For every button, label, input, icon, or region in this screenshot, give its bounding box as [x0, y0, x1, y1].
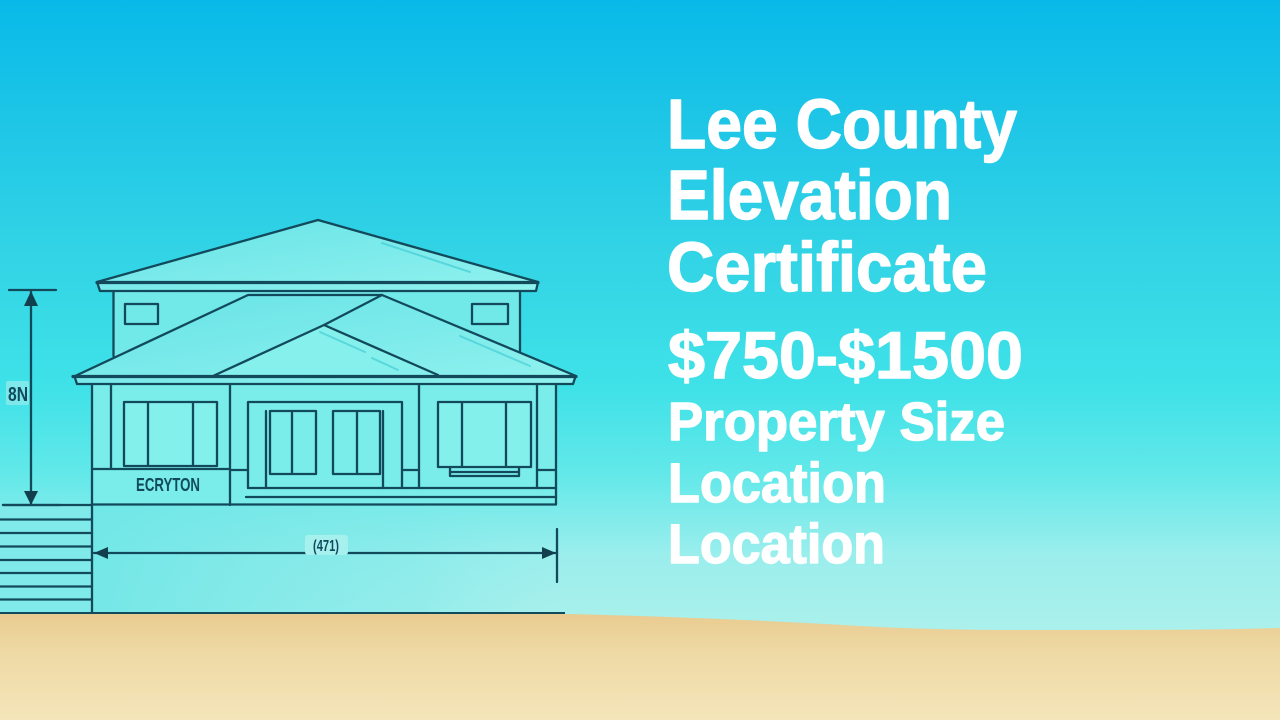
width label — [305, 535, 348, 555]
cost factors list: Location — [668, 451, 886, 514]
house sign label: ECRYTON — [136, 475, 200, 495]
price range: $750-$1500 — [668, 318, 1023, 392]
entry steps — [0, 505, 92, 613]
sandy ground — [0, 614, 1280, 720]
vertical height dimension — [3, 290, 60, 505]
title: Lee County — [667, 85, 1017, 163]
left door — [270, 411, 316, 474]
ground floor walls — [92, 384, 556, 613]
cost factors list: Property Size — [668, 392, 1005, 452]
horizontal width dimension — [94, 529, 557, 582]
upper roof — [97, 220, 538, 302]
width label: (471) — [313, 538, 339, 555]
left window — [124, 402, 217, 466]
porch floor lines — [92, 488, 556, 504]
lower roof — [73, 295, 576, 384]
raised foundation block — [92, 504, 558, 613]
cost factors list — [668, 392, 1005, 575]
right window — [438, 402, 531, 476]
house elevation drawing — [0, 220, 576, 613]
title: Certificate — [667, 228, 987, 306]
bottom arrowhead — [24, 491, 38, 505]
title: Elevation — [667, 156, 952, 234]
title — [667, 85, 1017, 306]
right door — [333, 411, 380, 474]
ground line — [0, 612, 565, 614]
upper storey — [113, 291, 520, 361]
upper left window — [125, 304, 158, 324]
height label: 8N — [8, 384, 28, 406]
front door frame — [248, 402, 402, 488]
height label — [6, 381, 29, 406]
right arrowhead — [542, 547, 556, 559]
upper right window — [472, 304, 508, 324]
top arrowhead — [24, 291, 38, 306]
cost factors list: Location — [668, 512, 885, 575]
left arrowhead — [94, 547, 108, 559]
